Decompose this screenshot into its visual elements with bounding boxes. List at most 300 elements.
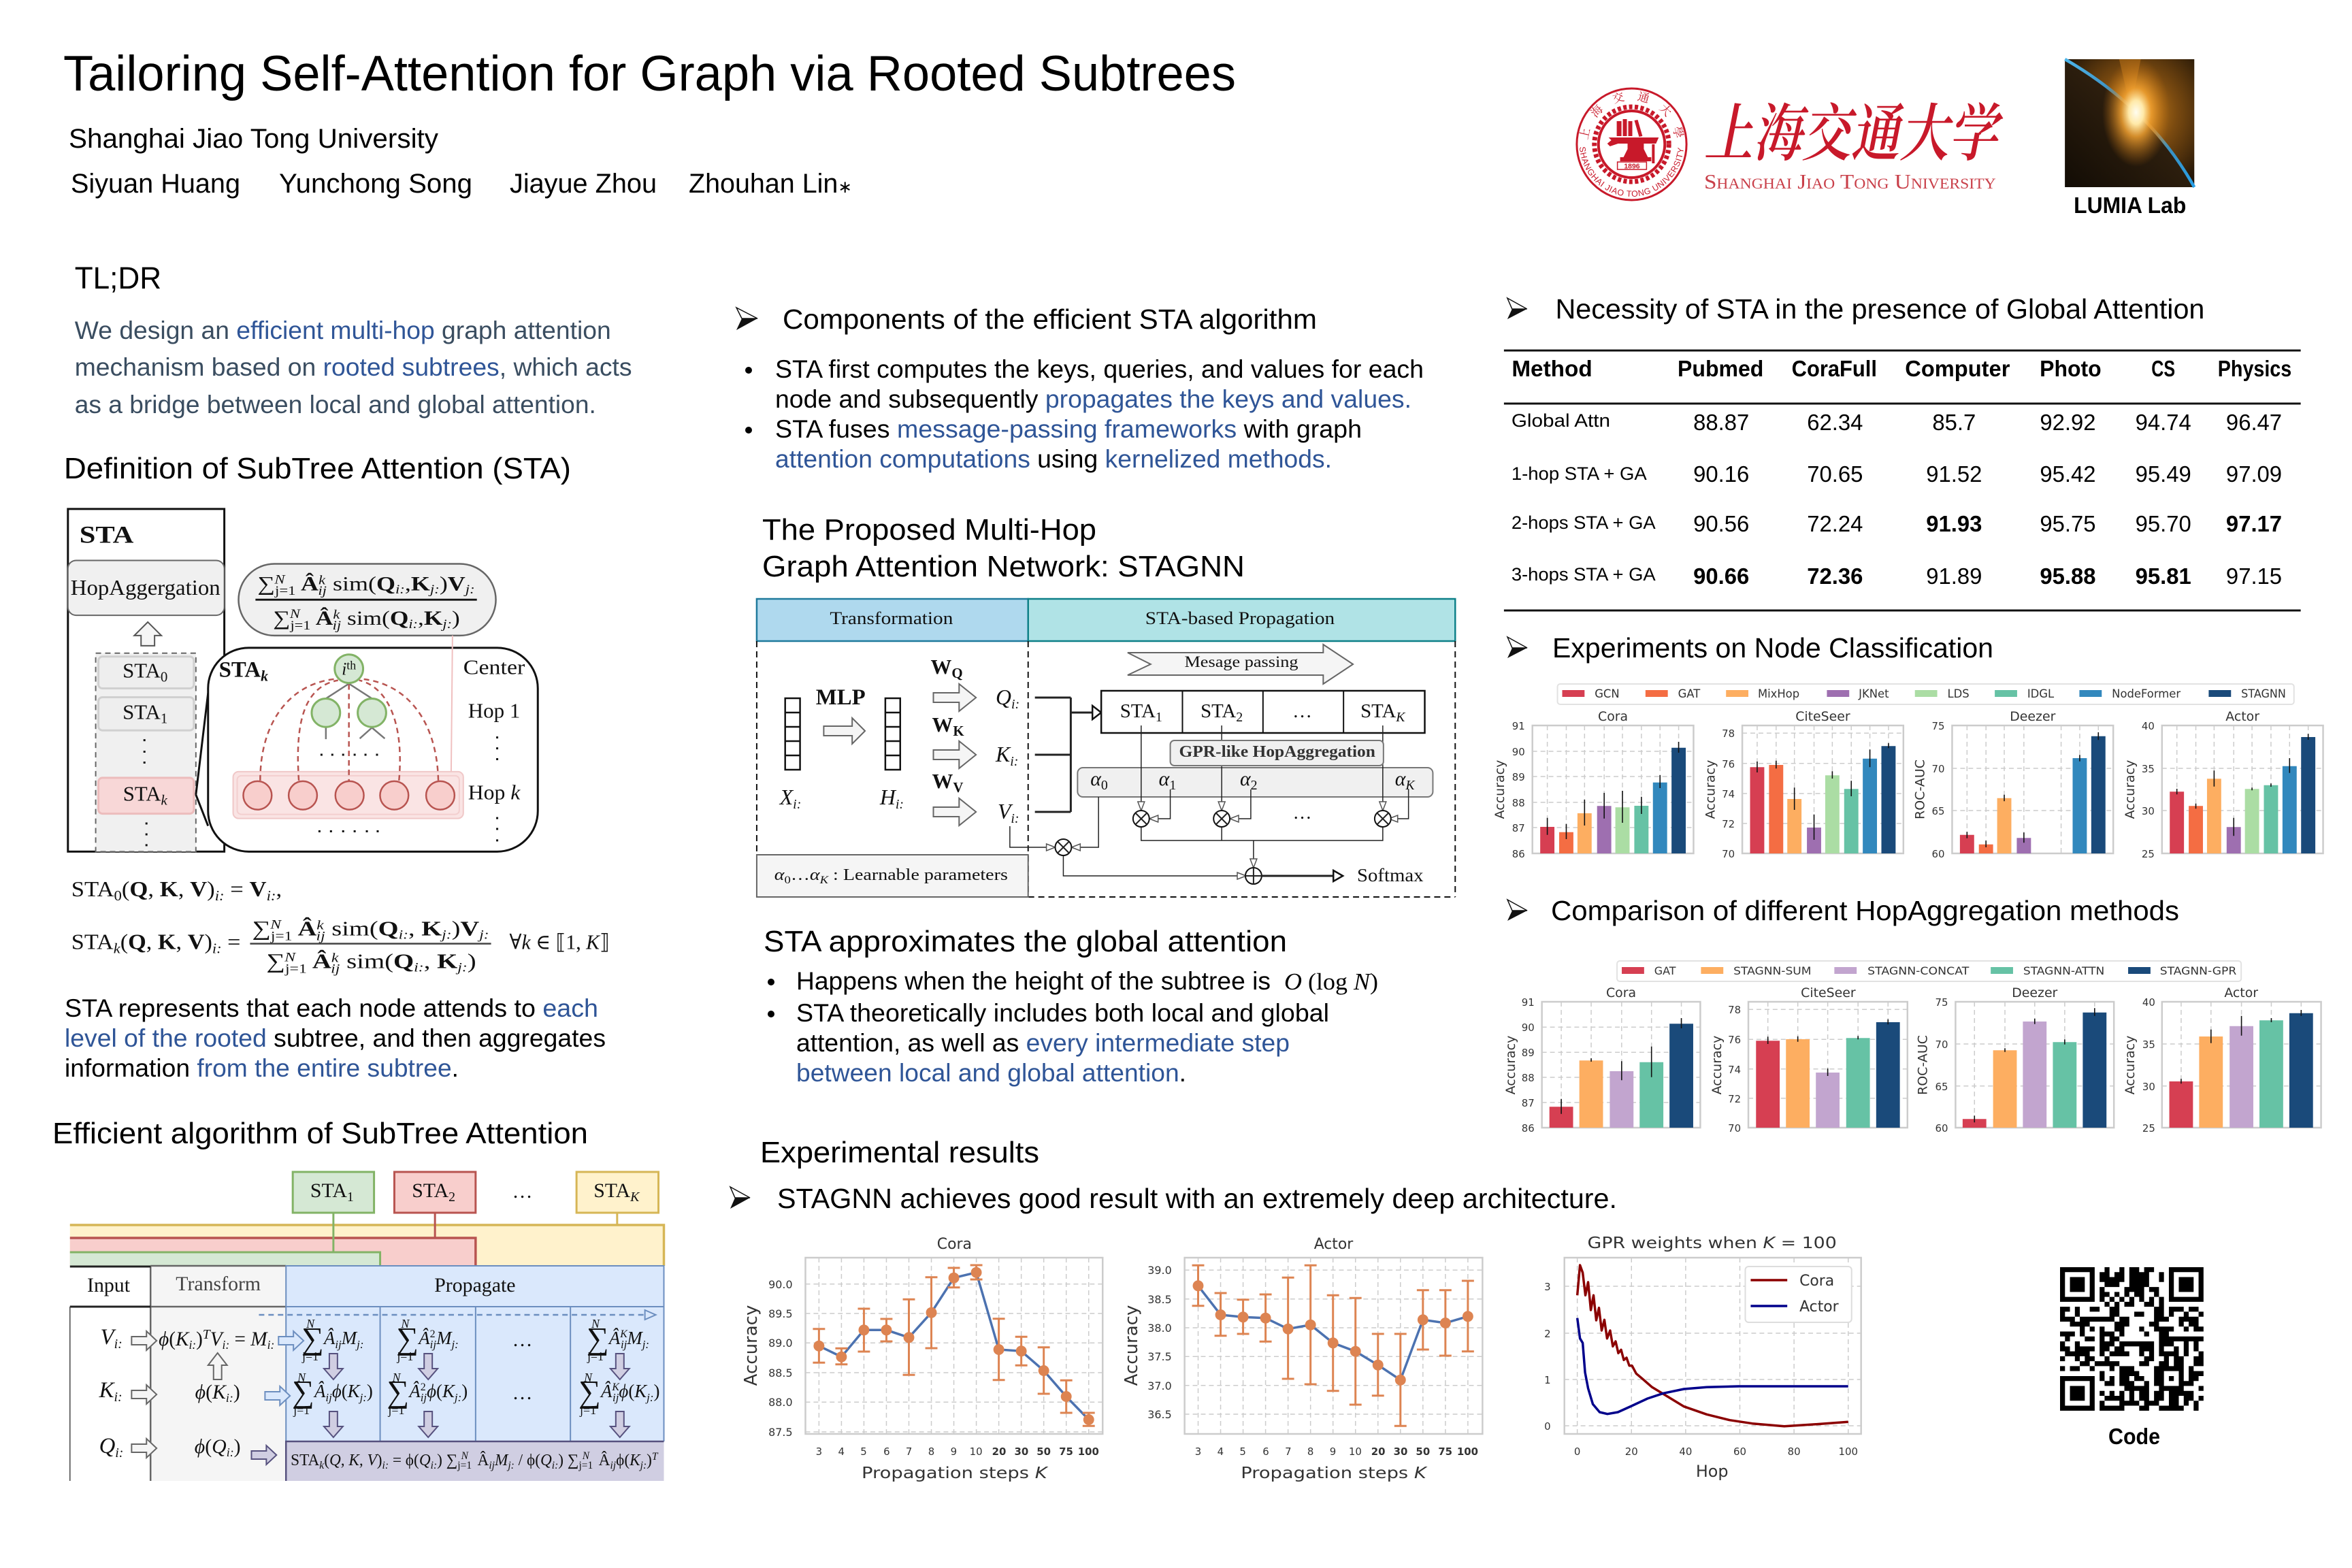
x ticks: 30: [1014, 1446, 1028, 1458]
formula bubble: [239, 564, 496, 636]
chart: Actor: 40: [2142, 996, 2155, 1009]
formula bubble: Â: [316, 607, 333, 630]
formula bubble: K: [411, 572, 430, 595]
chart: CiteSeer: [1710, 985, 1908, 1134]
propagate sums: ϕ: [332, 1381, 342, 1401]
box STA1: 1: [347, 1190, 354, 1205]
formula bubble: j:: [463, 583, 475, 597]
alpha box: α: [1159, 768, 1169, 790]
values: 62.34: [1807, 410, 1863, 435]
chart: Actor: 30: [2142, 1081, 2155, 1093]
ticks: 80: [1788, 1446, 1801, 1458]
transform formulas: ϕ(K: [159, 1328, 189, 1350]
chart: Deezer: 75: [1935, 996, 1948, 1009]
propagate sums: N: [400, 1317, 410, 1330]
heading: proposed network: Graph Attention Network: STAGNN: [762, 550, 1245, 583]
rooted subtree: th: [346, 659, 356, 672]
authors: Yunchong Song: [279, 169, 472, 199]
STA_k formula: i:: [431, 1460, 437, 1471]
X and H labels: [779, 785, 904, 812]
error bars: [813, 1265, 1095, 1426]
x ticks: 30: [1394, 1446, 1407, 1458]
method names: 3-hops STA + GA: [1512, 564, 1656, 585]
propagate sums: ϕ: [427, 1381, 436, 1401]
chart title: GPR weights when K = 100: [1588, 1235, 1837, 1252]
chart: Cora: 90: [1522, 1022, 1535, 1034]
propagate sums: ij: [325, 1391, 332, 1404]
propagate sums: M: [436, 1328, 453, 1348]
subheading: node classification: [1507, 632, 1993, 664]
title: Tailoring Self-Attention for Graph via Rooted Subtrees: [63, 45, 1236, 101]
propagate sums: M: [626, 1328, 643, 1348]
ticks: 40: [1679, 1446, 1692, 1458]
formula STAk: Â: [297, 917, 317, 941]
formula STA0: V: [250, 877, 267, 901]
Q K V labels: K: [996, 742, 1010, 766]
box STA1: STA: [310, 1179, 347, 1202]
method names: 2-hops STA + GA: [1512, 512, 1656, 533]
chart: Actor: [2123, 709, 2323, 860]
weight matrices: W: [931, 655, 951, 679]
x ticks: 6: [883, 1446, 890, 1458]
bullet list: attention, as well as every intermediate step: [796, 1028, 1290, 1057]
propagate sums: ∑: [301, 1321, 324, 1356]
formula bubble: k: [333, 608, 340, 622]
lab name: LUMIA Lab: [2074, 193, 2186, 218]
x ticks: 10: [1349, 1446, 1362, 1458]
connections: …: [1293, 802, 1311, 823]
propagate sums: ): [367, 1381, 373, 1401]
propagate sums: [292, 1317, 659, 1417]
propagate sums: …: [512, 1328, 532, 1351]
formula STAk: i:: [399, 928, 408, 943]
formula STAk: K: [421, 917, 442, 941]
heading: Necessity of STA in the presence of Global Attention: [1555, 293, 2204, 325]
STA_k formula: = ϕ(: [389, 1452, 419, 1469]
formula STAk: (: [120, 930, 128, 954]
y ticks: 36.5: [1147, 1408, 1172, 1421]
Q K V labels: Q: [996, 685, 1011, 709]
x ticks: 8: [928, 1446, 934, 1458]
y ticks: 39.0: [1147, 1264, 1172, 1277]
chart: CiteSeer: 72: [1722, 818, 1735, 830]
heading: TL;DR: [75, 261, 161, 295]
hop labels: Center: [463, 656, 525, 679]
formula STAk: V: [460, 917, 479, 941]
ticks: 60: [1733, 1446, 1746, 1458]
y ticks: 87.5: [768, 1426, 793, 1439]
panel: STAGNN architecture: [757, 599, 1455, 897]
propagate sums: j:: [641, 1338, 649, 1351]
legend: GAT: [1654, 964, 1676, 977]
line chart: Actor propagation steps: Accuracy: [1122, 1305, 1142, 1386]
connector bubble to hop k: [451, 636, 453, 772]
text block: STA explanation: STA represents that each node attends to each: [65, 994, 598, 1022]
table header: Computer: [1905, 356, 2010, 381]
STA_k formula: k: [319, 1460, 325, 1471]
chart: CiteSeer: [1703, 709, 1904, 860]
propagate sums: N: [591, 1317, 600, 1330]
propagate sums: K: [619, 1328, 628, 1340]
legend box: [757, 855, 1028, 897]
weight matrices: W: [932, 713, 953, 736]
transform formulas: ): [233, 1381, 240, 1403]
chart title: Cora: [937, 1236, 972, 1253]
propagate sums: j=1: [587, 1350, 604, 1363]
STA_k formula: N: [461, 1450, 469, 1462]
legend: STAGNN-ATTN: [2023, 964, 2104, 977]
weight matrices: V: [953, 779, 963, 796]
alpha box: α: [1240, 768, 1251, 790]
weight matrices: [931, 655, 964, 796]
x ticks: 100: [1078, 1446, 1099, 1458]
chart: Cora: 86: [1522, 1122, 1535, 1134]
X and H labels: i:: [896, 797, 904, 812]
heading: efficient algorithm: Efficient algorithm of SubTree Attention: [52, 1117, 588, 1150]
chart: Deezer: [1913, 709, 2113, 860]
formula STAk: ∑: [266, 949, 281, 973]
propagate sums: Â: [419, 1328, 430, 1348]
table header: Physics: [2218, 356, 2291, 381]
values: 95.70: [2136, 511, 2191, 536]
STA_k formula: i:: [382, 1460, 389, 1471]
dashed arrow: [259, 1310, 656, 1320]
transform formulas: ): [196, 1328, 203, 1350]
bullet list: STA fuses message-passing frameworks with graph: [775, 414, 1362, 443]
chart: CiteSeer: CiteSeer: [1801, 985, 1856, 1000]
bullet list: STA first computes the keys, queries, and values for each: [775, 355, 1424, 383]
x ticks: 100: [1457, 1446, 1478, 1458]
values: 70.65: [1807, 461, 1863, 487]
ticks: 1: [1544, 1374, 1551, 1386]
formula STAk: ,: [424, 949, 437, 973]
box STAK: K: [630, 1190, 640, 1205]
y ticks: 89.5: [768, 1307, 793, 1320]
down arrows: [324, 1354, 630, 1437]
formula bubble: k: [318, 573, 326, 587]
formula bubble: sim(: [327, 572, 376, 595]
text: STAGNN achieves good result with an extremely deep architecture.: [777, 1183, 1617, 1214]
bullet list: STA theoretically includes both local and global: [796, 998, 1329, 1027]
propagate sums: j=1: [293, 1403, 310, 1417]
legend: STAGNN-CONCAT: [1867, 964, 1970, 977]
input labels: i:: [114, 1390, 122, 1405]
table backgrounds: [70, 1266, 664, 1481]
icon: QR pattern: [2060, 1270, 2204, 1408]
column headers: [87, 1273, 516, 1296]
propagate sums: (K: [628, 1381, 647, 1401]
propagate sums: j:: [450, 1338, 459, 1351]
propagate sums: ): [461, 1381, 468, 1401]
x ticks: 4: [1218, 1446, 1224, 1458]
logo text: English name: Shanghai Jiao Tong University: [1704, 169, 1996, 193]
STA_k formula: j:: [506, 1460, 514, 1471]
rooted subtree: i: [342, 659, 346, 679]
formula STA0: i:: [215, 887, 225, 904]
chart: Deezer: ROC-AUC: [1916, 1035, 1931, 1095]
results table: [1504, 350, 2301, 610]
formula STAk: sim(: [340, 949, 393, 973]
formula STAk: Q, K, V): [128, 930, 212, 954]
icon: earth sunrise photo: [2065, 58, 2194, 187]
axis labels: Propagation steps K: [862, 1465, 1049, 1482]
STA stack: 0: [161, 669, 167, 685]
alpha box: α: [1395, 768, 1405, 790]
values: 95.75: [2040, 511, 2096, 536]
bullet list: Happens when the height of the subtree is: [796, 966, 1271, 995]
propagate sums: j=1: [579, 1403, 596, 1417]
plot frame and grid: [1565, 1258, 1861, 1434]
plot frame and grid: [805, 1258, 1102, 1434]
legend: [1745, 1267, 1852, 1322]
formula bubble: ij: [333, 619, 341, 633]
values: 90.56: [1693, 511, 1749, 536]
STA_k formula: j:: [639, 1460, 647, 1471]
formula bubble: N: [274, 572, 286, 587]
STA_k formula: j=1: [457, 1460, 472, 1471]
formula bubble: j=1: [289, 619, 311, 633]
formula bubble: j:: [440, 617, 452, 632]
label: Code: [2108, 1424, 2160, 1449]
MLP: MLP: [816, 685, 866, 710]
summary: [75, 316, 632, 419]
heading: proposed network: The Proposed Multi-Hop: [762, 513, 1096, 546]
x ticks: 9: [951, 1446, 957, 1458]
header propagation: STA-based Propagation: [1145, 608, 1335, 628]
formula STA0: =: [225, 877, 250, 901]
propagate sums: ij: [421, 1391, 427, 1404]
chart: Deezer: 60: [1935, 1122, 1948, 1134]
ticks: 20: [1625, 1446, 1638, 1458]
chart: CiteSeer: 74: [1728, 1064, 1741, 1076]
chart: Deezer: ROC-AUC: [1913, 760, 1928, 819]
chart: Cora: Accuracy: [1503, 1036, 1518, 1094]
propagate sums: j:: [645, 1391, 654, 1404]
heading: definition: Definition of SubTree Attention (STA): [64, 452, 571, 485]
authors: Jiayue Zhou: [510, 169, 657, 199]
propagate sums: j=1: [301, 1350, 318, 1363]
Q K V labels: i:: [1011, 697, 1019, 712]
formula STAk: =: [222, 930, 240, 954]
formula STAk: K: [437, 949, 457, 973]
formula bubble: V: [448, 572, 466, 595]
legend box: 0: [785, 875, 791, 886]
STA stack: STA: [122, 659, 161, 683]
formula STAk: sim(: [325, 917, 378, 941]
Q K V labels: i:: [1011, 811, 1019, 826]
chart: Deezer: 60: [1932, 848, 1944, 860]
transform formulas: i:: [227, 1446, 234, 1459]
formula STAk: ): [468, 949, 476, 973]
chart: CiteSeer: 76: [1722, 758, 1735, 770]
chart: Actor: 35: [2142, 763, 2155, 775]
alpha box: α: [1090, 768, 1101, 790]
message passing arrow: [1128, 644, 1353, 684]
header propagation: [1028, 599, 1455, 641]
X and H labels: X: [780, 785, 793, 809]
transform formulas: i:: [223, 1338, 229, 1352]
formula bubble: ∑: [257, 572, 272, 595]
formula bubble: ij: [318, 584, 327, 598]
weight matrices: W: [932, 769, 953, 793]
x ticks: 20: [992, 1446, 1006, 1458]
propagate sums: N: [583, 1371, 593, 1384]
x ticks: 3: [816, 1446, 822, 1458]
STA_k formula: Q: [540, 1452, 552, 1469]
line: [819, 1273, 1089, 1420]
header transformation: [757, 599, 1028, 641]
values: 94.74: [2136, 410, 2191, 435]
formula bubble: Q: [376, 572, 395, 595]
chart: CiteSeer: 76: [1728, 1034, 1741, 1046]
box STA2: 2: [448, 1190, 455, 1205]
STA cells: K: [1395, 710, 1406, 725]
icon: university emblem: [1575, 87, 1688, 201]
values: 85.7: [1932, 410, 1976, 435]
chart: Cora: [1492, 709, 1693, 860]
line: [1198, 1286, 1468, 1380]
chart: Actor: 25: [2142, 848, 2155, 860]
chart: Deezer: Deezer: [2012, 985, 2058, 1000]
propagate sums: Â: [609, 1328, 620, 1348]
input labels: V: [101, 1325, 114, 1350]
chart: CiteSeer: 70: [1722, 848, 1735, 860]
values: 95.49: [2136, 461, 2191, 487]
chart: Actor: 35: [2142, 1039, 2155, 1051]
weight matrices: K: [953, 723, 964, 739]
softmax: Softmax: [1357, 865, 1424, 885]
connections: [1010, 725, 1409, 884]
values: 91.89: [1926, 564, 1982, 589]
formula bubble: sim(: [341, 607, 390, 630]
formula STAk: k: [114, 941, 121, 957]
chart: CiteSeer: Accuracy: [1703, 760, 1718, 819]
x ticks: 3: [1195, 1446, 1201, 1458]
STA stack: k: [161, 792, 167, 808]
STA_k formula: / ϕ(: [514, 1452, 540, 1469]
propagate sums: ∑: [387, 1374, 409, 1409]
propagate sums: ): [654, 1381, 659, 1401]
table header: Method: [1512, 356, 1592, 381]
alpha box: K: [1405, 778, 1416, 793]
chart: Cora: Cora: [1606, 985, 1636, 1000]
formula STAk: N: [270, 918, 282, 932]
y ticks: 88.0: [768, 1396, 793, 1409]
formula STAk: ij: [316, 930, 325, 944]
STA_k formula: Â: [474, 1452, 489, 1469]
formula STAk: ): [452, 917, 460, 941]
bar chart group: node classification: [1492, 684, 2323, 860]
chart: Cora: Cora: [1598, 709, 1628, 724]
method names: [1512, 410, 1656, 585]
column headers: Input: [87, 1274, 131, 1296]
STA cells: STA: [1120, 700, 1156, 722]
legend: [1558, 684, 2294, 704]
formula: STA definitions: [71, 877, 610, 976]
STA_k formula: M: [494, 1452, 509, 1469]
formula STAk: Q: [393, 949, 414, 973]
formula STAk: [71, 917, 610, 976]
transform arrows: [933, 684, 976, 826]
bullet list: attention computations using kernelized methods.: [775, 444, 1332, 473]
propagate sums: (K: [342, 1381, 360, 1401]
hop labels: Hop k: [468, 781, 521, 804]
bullet list: [768, 966, 1378, 1087]
chart: Actor: Accuracy: [2123, 1036, 2138, 1094]
propagate sums: ∑: [587, 1321, 609, 1356]
values: 92.92: [2040, 410, 2096, 435]
propagate sums: …: [512, 1382, 532, 1404]
legend: LDS: [1947, 687, 1970, 700]
chart: Actor: 25: [2142, 1122, 2155, 1134]
propagate sums: ij: [430, 1338, 436, 1351]
formula bubble: i:: [395, 583, 405, 597]
STA stack: STA: [123, 783, 161, 806]
Q K V labels: i:: [1010, 754, 1018, 769]
subheading: STAGNN result: [730, 1183, 1617, 1214]
error bars: [1192, 1265, 1474, 1426]
curve Actor: [1578, 1318, 1848, 1414]
formula STAk: j=1: [284, 962, 307, 976]
propagate sums: Â: [314, 1381, 325, 1401]
table header: Pubmed: [1678, 356, 1763, 381]
icon: university emblem: 上 海 交 通 大 學: [1579, 91, 1684, 140]
transform formulas: i:: [189, 1338, 196, 1352]
propagate sums: 2: [421, 1382, 426, 1393]
x ticks: [1195, 1446, 1478, 1458]
message passing arrow: Mesage passing: [1184, 653, 1298, 670]
chart: Cora: 91: [1512, 720, 1525, 732]
formula bubble: ): [452, 607, 460, 630]
chart: Cora: 86: [1512, 848, 1525, 860]
formula STA0: i:: [267, 887, 276, 904]
STA stack: STA: [122, 700, 161, 723]
ticks: 2: [1544, 1328, 1551, 1340]
bar chart group: HopAggregation: [1503, 961, 2321, 1134]
chart title: Actor: [1314, 1236, 1354, 1253]
column headers: Propagate: [434, 1274, 516, 1296]
arrow up: [208, 1353, 227, 1379]
STA_k detail box: [208, 648, 538, 851]
chart: CiteSeer: 78: [1728, 1004, 1741, 1016]
label STA_k: k: [261, 668, 268, 685]
STA_k formula: T: [652, 1451, 659, 1463]
formula bubble: Â: [301, 572, 319, 595]
formula STAk: k: [316, 919, 324, 933]
chart: Actor: 30: [2142, 805, 2155, 817]
propagate sums: ij: [612, 1391, 619, 1404]
x ticks: 10: [970, 1446, 983, 1458]
hop labels: Hop 1: [468, 699, 520, 722]
propagate sums: ϕ: [619, 1381, 628, 1401]
chart: Cora: Accuracy: [1492, 760, 1507, 819]
transform formulas: ϕ(Q: [195, 1435, 227, 1458]
ellipsis: …: [512, 1180, 532, 1203]
STA_k formula: N: [582, 1450, 590, 1462]
propagate sums: ∑: [578, 1374, 601, 1409]
STA_k formula: K: [629, 1452, 641, 1469]
STA_k formula: (: [324, 1452, 329, 1469]
chart: Cora: 88: [1512, 797, 1525, 809]
propagate sums: K: [611, 1382, 620, 1393]
legend: [1617, 961, 2241, 981]
x ticks: 8: [1307, 1446, 1313, 1458]
STA cells: 1: [1156, 710, 1162, 725]
y ticks: [768, 1278, 793, 1439]
HopAggregation box: HopAggergation: [71, 576, 220, 600]
panel: STA diagram: [68, 509, 538, 851]
STA_k formula: Q, K, V): [329, 1452, 382, 1469]
